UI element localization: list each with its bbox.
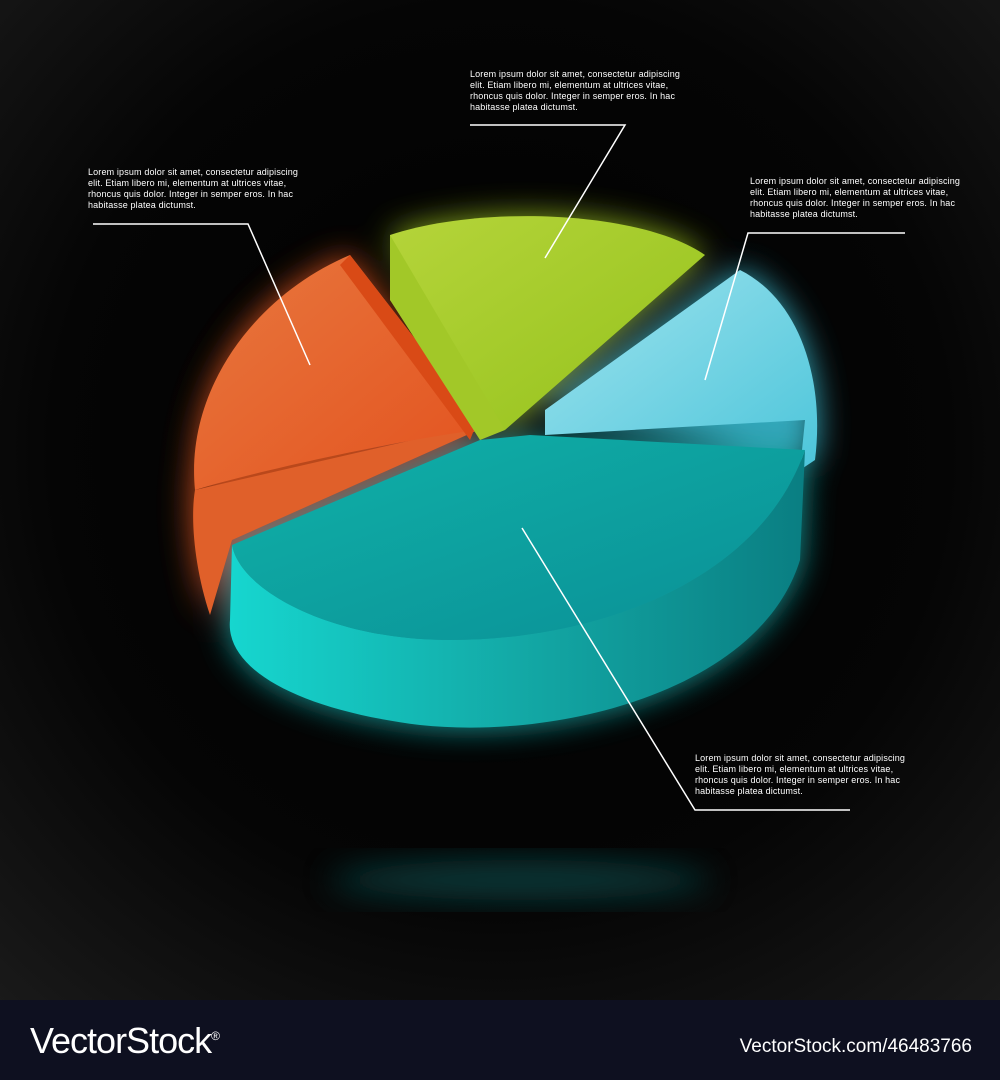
glow shadow [330,860,710,900]
text: right: elit. Etiam libero mi, elementum at ultrices vitae, [750,187,948,197]
text: left [88,167,298,210]
text: bottom: rhoncus quis dolor. Integer in semper eros. In hac [695,775,900,785]
text: top: habitasse platea dictumst. [470,102,578,112]
text: bottom [695,753,905,796]
pie chart [193,216,817,728]
leader lines [93,125,905,810]
text: right: rhoncus quis dolor. Integer in semper eros. In hac [750,198,955,208]
slice: teal [230,435,805,728]
slice: green [390,216,705,440]
text: left: rhoncus quis dolor. Integer in semper eros. In hac [88,189,293,199]
text: top [470,69,680,112]
text: right: Lorem ipsum dolor sit amet, consectetur adipiscing [750,176,960,186]
slice: light blue [545,270,817,470]
footer url: VectorStock.com/46483766 [740,1036,972,1057]
text: bottom: Lorem ipsum dolor sit amet, consectetur adipiscing [695,753,905,763]
text: bottom: habitasse platea dictumst. [695,786,803,796]
text: right [750,176,960,219]
text: right: habitasse platea dictumst. [750,209,858,219]
text: top: elit. Etiam libero mi, elementum at ultrices vitae, [470,80,668,90]
text: bottom: elit. Etiam libero mi, elementum at ultrices vitae, [695,764,893,774]
footer logo: VectorStock® [30,1020,219,1061]
pie glow [191,216,817,728]
text: left: habitasse platea dictumst. [88,200,196,210]
text: top: Lorem ipsum dolor sit amet, consectetur adipiscing [470,69,680,79]
text: top: rhoncus quis dolor. Integer in semper eros. In hac [470,91,675,101]
text: left: Lorem ipsum dolor sit amet, consectetur adipiscing [88,167,298,177]
slice: orange [193,255,478,615]
text: left: elit. Etiam libero mi, elementum at ultrices vitae, [88,178,286,188]
